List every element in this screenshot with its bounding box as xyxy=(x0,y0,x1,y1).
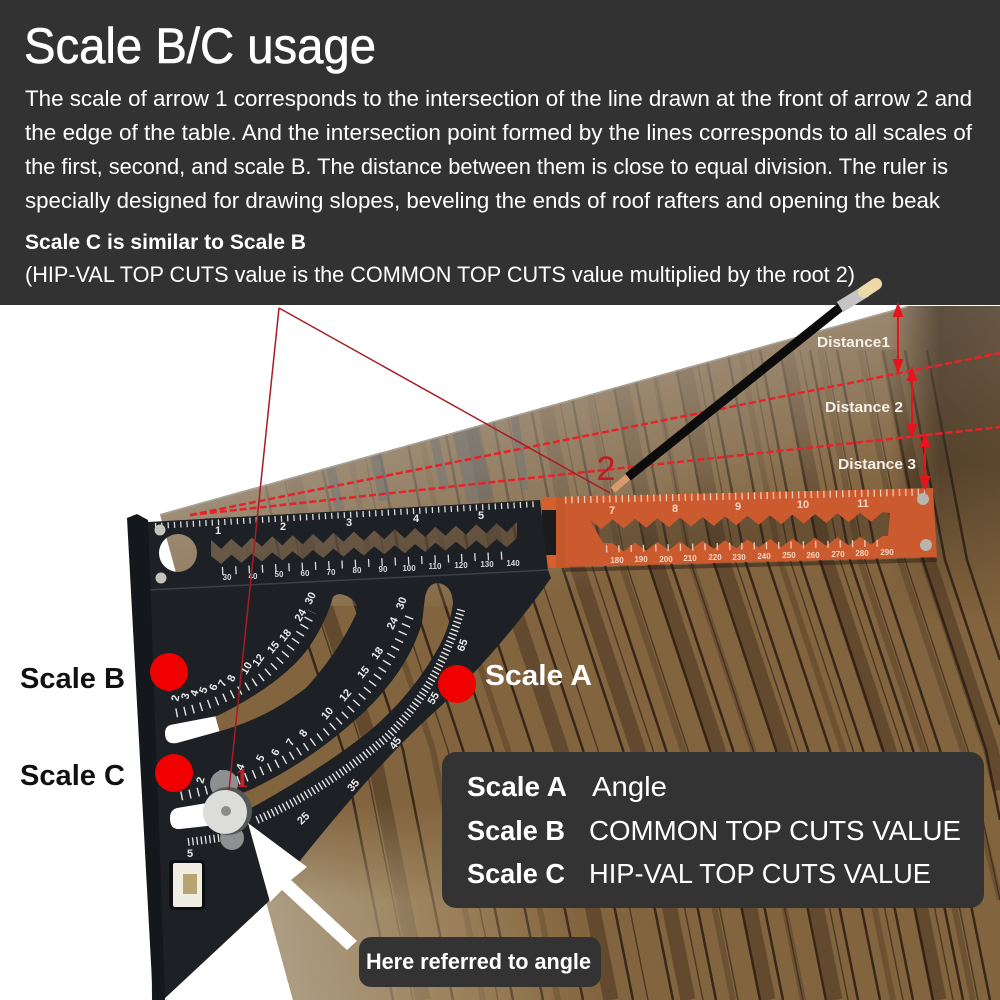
description text: the first, second, and scale B. The distance between them is close to equal division. The ruler is xyxy=(25,154,948,179)
top ruler ticks and numbers: 5 xyxy=(478,510,484,522)
top ruler ticks and numbers: 3 xyxy=(346,517,352,529)
distance arrows xyxy=(894,305,929,488)
left edge bar xyxy=(127,514,165,1000)
scale C ticks and numbers: 2 xyxy=(194,776,208,785)
dark upper right area xyxy=(896,306,1000,594)
legend panel: Scale C xyxy=(467,858,565,889)
top ruler ticks and numbers: 60 xyxy=(301,569,310,578)
description text: specially designed for drawing slopes, beveling the ends of roof rafters and opening the beak xyxy=(25,188,941,213)
orange ruler extension: 200 xyxy=(659,555,673,564)
white arrow xyxy=(248,823,357,950)
marker 1: 1 xyxy=(235,763,249,793)
orange ruler extension: 220 xyxy=(708,553,722,562)
scale A ticks and numbers: 35 xyxy=(345,777,362,794)
hinge xyxy=(541,497,565,568)
description text xyxy=(25,86,973,213)
orange ruler extension: 8 xyxy=(672,503,678,515)
orange ruler extension: 250 xyxy=(782,551,796,560)
black rafter square xyxy=(127,500,551,1000)
wood table background xyxy=(160,306,1000,1000)
scale labels: Scale C xyxy=(20,760,125,792)
distance labels xyxy=(817,335,916,473)
scale C ticks and numbers: 8 xyxy=(297,728,310,740)
top ruler ticks and numbers: 50 xyxy=(275,570,284,579)
scale B ticks and numbers: 10 xyxy=(239,660,255,677)
scale B ticks and numbers: 6 xyxy=(207,682,221,692)
scale A ticks and numbers: 25 xyxy=(295,810,312,827)
locking knob xyxy=(203,770,252,850)
scale C ticks and numbers: 4 xyxy=(234,762,248,772)
orange ruler extension: 210 xyxy=(683,554,697,563)
orange ruler extension: 180 xyxy=(610,556,624,565)
scale B ticks and numbers: 12 xyxy=(250,652,267,669)
light lower left area xyxy=(266,811,584,1000)
legend panel: Angle xyxy=(592,771,667,802)
scale B ticks and numbers: 5 xyxy=(197,685,211,695)
distance labels: Distance1 xyxy=(817,335,890,351)
scale B ticks and numbers: 2 xyxy=(170,694,182,702)
scale C ticks and numbers: 5 xyxy=(254,753,268,764)
legend panel: Scale A xyxy=(467,771,567,802)
callout: here referred to angle: Here referred to angle xyxy=(366,949,591,974)
title: Scale B/C usage xyxy=(24,18,376,74)
scale B ticks and numbers: 8 xyxy=(225,673,239,684)
scale C ticks and numbers: 15 xyxy=(355,664,372,681)
scale C ticks and numbers: 6 xyxy=(269,747,283,758)
scale A ticks and numbers: 55 xyxy=(426,690,442,707)
orange ruler extension: 9 xyxy=(735,501,741,513)
scale A ticks and numbers: 45 xyxy=(387,735,404,752)
black rafter square: 5 xyxy=(187,848,193,860)
scale C ticks and numbers: 12 xyxy=(337,687,354,704)
orange ruler extension xyxy=(560,488,937,570)
scale C ticks and numbers: 24 xyxy=(385,615,401,632)
top ruler ticks and numbers: 2 xyxy=(280,521,286,533)
shadow seen through ruler slots xyxy=(205,505,895,570)
scale labels xyxy=(20,660,592,792)
scale B ticks and numbers xyxy=(170,590,319,713)
scale B ticks and numbers: 30 xyxy=(303,590,319,607)
orange ruler extension: 280 xyxy=(855,549,869,558)
legend panel: Scale B xyxy=(467,815,565,846)
scale C ticks and numbers: 7 xyxy=(284,737,298,748)
scale B ticks and numbers: 24 xyxy=(293,606,310,624)
scale B ticks and numbers: 3 xyxy=(180,692,192,700)
distance labels: Distance 2 xyxy=(825,400,903,416)
rivets xyxy=(154,524,166,584)
note on scale C: Scale C is similar to Scale B xyxy=(25,230,306,254)
top ruler ticks and numbers: 90 xyxy=(379,565,388,574)
orange ruler extension: 270 xyxy=(831,550,845,559)
legend panel: COMMON TOP CUTS VALUE xyxy=(589,815,961,846)
description text: The scale of arrow 1 corresponds to the intersection of the line drawn at the front of arrow 2 and xyxy=(25,86,972,111)
legend panel: HIP-VAL TOP CUTS VALUE xyxy=(589,858,931,889)
scale A ticks and numbers xyxy=(257,607,471,827)
top ruler ticks and numbers: 1 xyxy=(215,525,221,537)
scale B ticks and numbers: 15 xyxy=(265,639,282,656)
scale C ticks and numbers: 3 xyxy=(216,768,230,778)
orange ruler extension: 11 xyxy=(857,498,869,510)
scale C ticks and numbers: 18 xyxy=(369,645,386,662)
top ruler ticks and numbers: 110 xyxy=(429,562,442,571)
top ruler ticks and numbers: 80 xyxy=(353,566,362,575)
red dashed guide lines xyxy=(190,353,1000,515)
top ruler ticks and numbers: 30 xyxy=(223,573,232,582)
orange ruler extension: 7 xyxy=(609,505,615,517)
orange ruler extension: 230 xyxy=(732,553,746,562)
orange ruler extension: 240 xyxy=(757,552,771,561)
top ruler ticks and numbers: 40 xyxy=(249,572,258,581)
scale C ticks and numbers xyxy=(181,596,410,796)
top ruler ticks and numbers: 140 xyxy=(506,559,520,568)
top ruler ticks and numbers: 70 xyxy=(327,568,336,577)
orange ruler extension: 290 xyxy=(880,548,894,557)
legend panel xyxy=(442,752,984,908)
scale B ticks and numbers: 7 xyxy=(216,678,230,689)
red dots xyxy=(150,653,476,792)
triangle construction lines xyxy=(229,308,610,790)
scale B ticks and numbers: 18 xyxy=(277,627,294,644)
orange ruler extension: 10 xyxy=(797,499,809,511)
scale labels: Scale B xyxy=(20,663,125,695)
spirit level window xyxy=(169,860,205,910)
lower scale ticks xyxy=(188,836,235,842)
top ruler ticks and numbers: 4 xyxy=(413,513,420,525)
scale C ticks and numbers: 30 xyxy=(394,596,410,611)
top ruler ticks and numbers xyxy=(155,504,538,582)
note on scale C xyxy=(25,230,855,287)
top ruler ticks and numbers: 120 xyxy=(454,561,468,570)
top ruler ticks and numbers: 130 xyxy=(480,560,494,569)
callout: here referred to angle xyxy=(359,937,601,987)
note on scale C: (HIP-VAL TOP CUTS value is the COMMON TOP CUTS value multiplied by the root 2) xyxy=(25,262,855,287)
orange ruler extension: 260 xyxy=(806,551,820,560)
scale B ticks and numbers: 4 xyxy=(188,688,202,698)
marker 2: 2 xyxy=(597,450,615,488)
distance labels: Distance 3 xyxy=(838,457,916,473)
description text: the edge of the table. And the intersection point formed by the lines corresponds to all scales of xyxy=(25,120,973,145)
top ruler ticks and numbers: 100 xyxy=(402,564,416,573)
grey faded area near the table edge xyxy=(160,306,1000,606)
scale A ticks and numbers: 65 xyxy=(455,638,471,653)
bluish grain bands xyxy=(326,414,529,511)
scale labels: Scale A xyxy=(485,660,592,692)
pencil xyxy=(613,284,876,490)
scale C ticks and numbers: 10 xyxy=(319,705,336,722)
orange ruler extension: 190 xyxy=(634,555,648,564)
header panel xyxy=(0,0,1000,305)
